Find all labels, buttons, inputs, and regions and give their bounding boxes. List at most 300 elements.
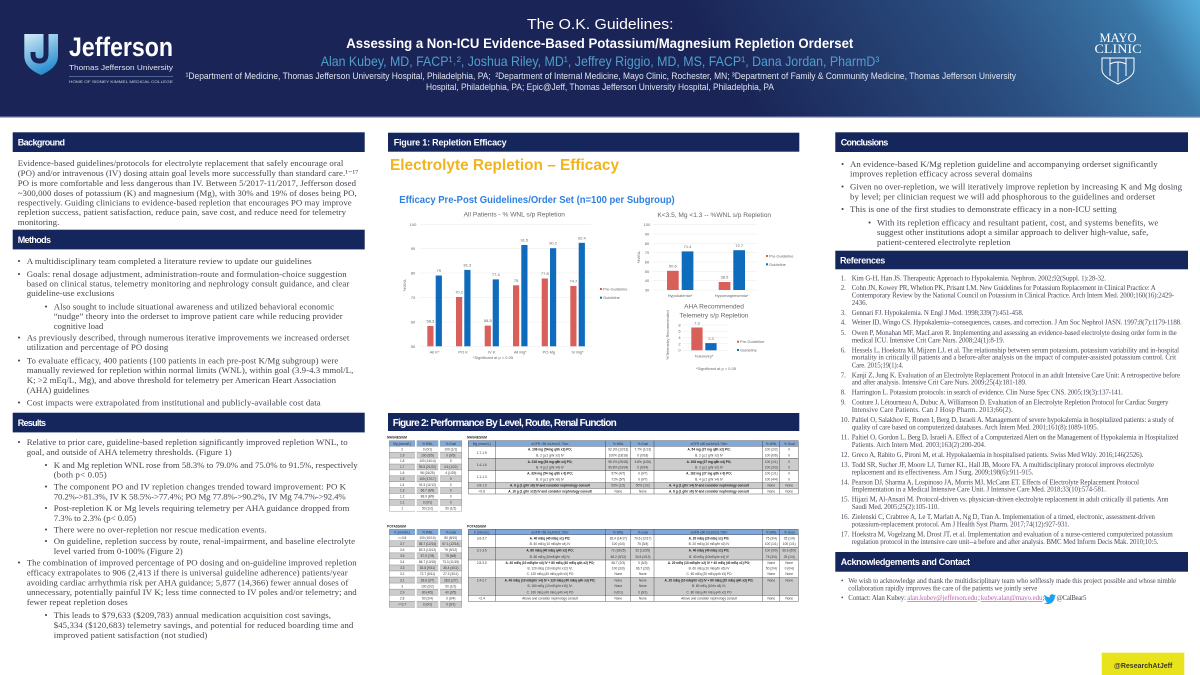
table: potassium by level: 73.3 (11/15) [442,560,459,564]
table: magnesium by level: 1.5 [400,477,405,481]
results bullets: (both p< 0.05) [54,470,107,480]
heading: acknowledgements: Acknowledgements and Contact [841,557,970,567]
reference list: 5. [841,330,846,337]
table: potassium protocol: None [614,572,622,576]
background text: PO is more comfortable and less dangerous than IV. Between 5/2017-11/2017, Jefferson dosed [18,178,357,188]
bar chart: low potassium and magnesium: Guideline [769,262,787,267]
figure headline: Electrolyte Repletion – Efficacy [390,157,619,174]
bar chart: telemetry: 7.3 [694,320,701,326]
conclusions bullets: An evidence-based K/Mg repletion guideline and accompanying orderset significantly [850,159,1158,169]
conclusions bullets: patient-centered electrolyte repletion [877,237,1011,247]
table: potassium protocol: 69.2 (9/13) [611,555,626,559]
table: magnesium protocol: B. 6 g (1 g/hr x6) IV [536,478,565,482]
table: magnesium by level: 0 [450,495,452,499]
table: potassium by level: 28.6 (2/7) [421,578,434,582]
table: potassium by level: K (mmol/L) [394,530,410,534]
reference list: Greco A, Rabito G, Pironi M, et al. Hypokalaemia in hospitalised patients. Swiss Med Wkly. 2016;146(2526). [852,452,1144,459]
table: potassium protocol: None [614,584,622,588]
table: magnesium by level: 96 (24/25) [420,471,435,475]
contact line: ; [978,595,980,602]
results bullets: • [18,558,21,568]
heading: figure 2 [388,413,799,431]
Mayo Clinic logo: MAYO [1099,31,1137,45]
reference list: Pearson DJ, Sharma A, Lospinoso JA, Morris MJ, McCann ET. Effects of Electrolyte Replacement Protocol [852,479,1139,486]
heading: figure 1: Figure 1: Repletion Efficacy [394,138,507,148]
table: potassium by level: 100 (2/2) [421,584,434,588]
table: potassium protocol: 66.6 (6/9) [782,548,796,552]
reference list: Intensive Care Patients. Can J Hosp Pharm. 2013;66(2). [852,407,1013,414]
bar chart: low potassium and magnesium [636,212,794,298]
reference list: Todd SR, Sucher JF, Moore LJ, Turner KL, Hall JB, Moore FA. A multidisciplinary protocol improves electrolyte [852,462,1154,469]
table: potassium protocol: A. 80 mEq (40 mEq q4h x2) PO; [526,548,574,552]
methods bullets: • [18,398,21,408]
table: magnesium protocol: eGFR >50 mL/min/1.73m² [532,442,568,446]
bar chart: all patients: *Significant at p < 0.05 [473,355,514,360]
heading: background: Background [18,138,65,148]
table: potassium protocol: 100 (3/3) [612,566,625,570]
table: potassium by level: 83.3 (10/12) [419,548,436,552]
reference list: Kim G-H, Han JS. Therapeutic Approach to Hypokalemia. Nephron. 2002;92(Suppl. 1):28-32. [852,276,1106,283]
table: potassium protocol: C. 60 mEq (20 mEq q4h x3) PO [686,572,732,576]
table: magnesium protocol: A. 54 mg (27 mg q8h x2) PO; [687,448,731,452]
bar chart: low potassium and magnesium: 70 [645,250,650,255]
table: magnesium protocol: 0 (0/7) [638,472,647,476]
table: magnesium protocol: % WNL [613,442,624,446]
table: magnesium protocol: A. 6 g (1 g/hr x6) IV and consider nephrology consult [669,489,750,493]
table: potassium protocol: 50 (2/4) [766,566,777,570]
bar chart: telemetry: 4 [678,335,681,340]
background text: Evidence-based guidelines/protocols for electrolyte replacement that safely encourage oral [18,158,344,168]
table: magnesium protocol: 100 (2/2) [765,448,778,452]
heading: results: Results [18,418,46,428]
table: potassium by level: POTASSIUM [387,524,406,528]
results bullets: • [44,536,48,546]
table: potassium protocol: 100 (1/1) [765,542,778,546]
conclusions bullets: by level; per clinician request we will add phosphorous to the guidelines and orderset [850,192,1156,202]
table: potassium protocol: 82.4 (14/17) [610,536,627,540]
table: magnesium protocol [467,436,798,494]
table: magnesium protocol: B. 4 g (1 g/hr x4) IV [695,478,724,482]
bar chart: all patients: PO K [458,350,468,354]
table: potassium by level: 36.4 (4/11) [443,566,458,570]
table: potassium by level: 3.5 [400,554,405,558]
panel: background [13,132,365,227]
panel: acknowledgements and contact [835,552,1188,604]
affiliations: Hospital, Philadelphia, PA; Epic@Jeff, Thomas Jefferson University Hospital, Philadelphia, PA [426,82,775,93]
table: potassium by level: 3.4 [400,560,405,564]
bar chart: low potassium and magnesium: %WNL [636,250,641,263]
table: potassium protocol: 75 (3/4) [766,555,777,559]
table: potassium protocol: 2.4-2.7 [477,578,487,582]
bar chart: telemetry: *Significant at p < 0.05 [696,366,737,371]
results bullets: unnecessary, potentially painful IV K; less time connected to IV poles and/or telemetry; and [27,587,357,597]
contact line: ; [1042,595,1044,602]
methods bullets: Also sought to include situational awareness and utilized behavioral economic [54,302,334,312]
title: The O.K. Guidelines: [527,16,674,33]
table: magnesium by level: 2 [401,447,403,451]
table: potassium protocol: None [785,572,793,576]
conclusions bullets [841,159,1183,247]
table: magnesium by level: 1.6 [400,471,405,475]
table: magnesium protocol: A. 4 g (1 g/hr x4) IV and consider nephrology consult [669,484,750,488]
table: potassium protocol: eGFR >50 mL/min/1.73m² [532,530,568,534]
acknowledgement text [841,578,1176,592]
background text: (PO) and/or intravenous (IV) dosing attain goal levels more successfully than standard care.¹⁻¹⁷ [18,168,358,178]
contact line: @CalBear5 [1056,595,1087,602]
conclusions bullets: This is one of the first studies to demonstrate efficacy in a non-ICU setting [850,204,1117,214]
heading: figure 2: Figure 2: Performance By Level, Route, Renal Function [393,418,617,429]
table: potassium protocol: None [785,596,793,600]
table: potassium by level: <=2.7 [398,602,407,606]
bar chart: all patients: IV Mg* [571,350,584,354]
reference list: 2. [841,285,846,292]
table: magnesium protocol: A. 162 mg (27 mg q8h x 6) PO; [686,472,732,476]
reference list: Contemporary Review by the National Council on Potassium in Clinical Practice. Arch Intern Med. 2000;160(16):2429- [852,293,1175,300]
table: potassium protocol: <2.4 [479,596,485,600]
header banner [0,0,1200,118]
table: potassium protocol: A. 20 mEq (10 mEq/hr x2) IV + 40 mEq (40 mEq x1) PO; [668,561,750,565]
bar chart: low potassium and magnesium: Hypomagnesemia* [715,293,749,298]
table: magnesium by level: 1.2 [400,495,405,499]
reference list: Harrington L. Potassium protocols: in search of evidence. Clin Nurse Spec CNS. 2005;19(3):137-141. [852,390,1123,397]
table: potassium protocol: eGFR ≤50 mL/min/1.73m² [691,530,727,534]
table: magnesium by level: 0 [450,483,452,487]
methods bullets: To evaluate efficacy, 400 patients (100 patients in each pre-post K/Mg subgroup) were [27,356,338,366]
table: potassium protocol: A. 20 mEq (10 mEq/hr x2) IV + 60 mEq (20 mEq q4h x3) PO; [664,578,754,582]
bar chart: all patients: All Patients - % WNL s/p Repletion [464,211,565,218]
results bullets: The component PO and IV repletion changes trended toward improvement: PO K [54,482,347,492]
table: potassium protocol: None [767,596,775,600]
table: magnesium by level: 1.7 [400,465,405,469]
table: potassium protocol: C. 160 mEq (40 mEq q4h x4) PO [527,590,574,594]
table: magnesium by level: % WNL [422,442,433,446]
table: potassium protocol: 25 (1/4) [784,536,795,540]
contact line: alan.kubey@jefferson.edu [907,595,978,602]
table: potassium protocol: 66.7 (2/3) [636,566,650,570]
heading: conclusions: Conclusions [841,138,888,148]
methods bullets: guideline-use exclusions [27,288,115,298]
table: magnesium by level: 0 (0/5) [446,453,455,457]
table: magnesium protocol: 100 (1/1) [765,460,778,464]
reference list: 10. [841,417,850,424]
bar chart: all patients: 60 [411,320,416,324]
table: potassium protocol: 2.8-3.0 [477,561,487,565]
bar chart: telemetry: 8 [678,322,681,328]
reference list: Couture J, Létourneau A, Dubuc A, Williamson D. Evaluation of an Electrolyte Repletion Protocol for Cardiac Surgery [852,400,1169,407]
callout: research handle: @ResearchAtJeff [1114,661,1173,670]
table: magnesium protocol: 57% (4/7) [611,472,625,476]
callout: research handle [1102,653,1184,675]
table: potassium protocol: 3.1-3.5 [477,548,487,552]
table: magnesium by level: 91.5 (11/12) [419,483,436,487]
reference list: 13. [841,462,850,469]
bar chart: all patients: 74.7 [570,278,578,284]
methods bullets: “nudge” theory into the orderset to improve patient care while reducing provider [54,311,343,321]
table: potassium by level: 3.3 [400,566,405,570]
table: magnesium by level: 88.9 (8/9) [421,495,434,499]
table: potassium by level [387,524,462,608]
bar chart: all patients: 79 [437,268,442,273]
Jefferson logo: Jefferson [69,32,173,62]
table: potassium protocol: B. 80 mEq (10/hr x8) IV; [692,584,726,588]
background text: repletion success, patient satisfaction, reduce pain, save cost, and reduce need for telemetry [18,207,347,217]
table: potassium protocol: None [639,572,647,576]
results bullets: • [44,503,48,513]
bar chart: all patients: %WNL [402,278,407,291]
background text: monitoring. [18,217,59,227]
table: magnesium protocol: % WNL [766,442,777,446]
table: magnesium protocol: 1.7-1.9 [477,451,487,455]
conclusions bullets: • [841,204,844,214]
table: magnesium protocol: B. 2 g (1 g/hr x2) IV [695,466,724,470]
table: magnesium protocol: None [639,489,647,493]
table: magnesium by level: 1.4 [400,483,405,487]
table: potassium protocol: None [639,584,647,588]
methods bullets: utilization and percentage of PO dosing [27,342,169,352]
reference list: 1. [841,276,846,283]
methods bullets: Goals: renal dosage adjustment, administration-route and formulation-choice suggestion [27,269,347,279]
table: magnesium protocol: 50% (1/2) [611,484,625,488]
table: magnesium protocol: 3.8% (1/26) [635,460,651,464]
bar chart: all patients: Guideline [603,295,621,300]
table: potassium protocol: 30.8 (4/13) [635,555,651,559]
bar chart: all patients: 77.8 [541,271,549,276]
table: magnesium by level: 1.3 [400,489,405,493]
table: potassium protocol: B. 40 mEq (10mEq/hr x4) IV [689,555,730,559]
bar chart: all patients: Pre-Guideline [603,286,628,292]
reference list: 9. [841,400,846,407]
conclusions bullets: With its repletion efficacy and resultant patient, cost, and systems benefits, we [877,218,1158,228]
table: potassium protocol: 0 (0/3) [638,561,647,565]
table: potassium protocol: B. 40 mEq (10 mEq/hr x4) IV [530,542,571,546]
results bullets: • [44,482,48,492]
bar chart: all patients: 91.5 [521,238,529,242]
reference list: Implementation in a Medical Intensive Care Unit. J Intensive Care Med. 2018;33(10):574-581. [852,487,1106,494]
table: potassium protocol: K (mmol/L) [474,530,489,534]
table: magnesium protocol: 0 [788,454,790,458]
reference list: 11. [841,435,849,442]
table: magnesium by level: 0 [450,459,452,463]
table: magnesium protocol: 0.8-1.0 [477,484,487,488]
table: magnesium protocol: B. 2 g (1 g/hr x2) IV [536,454,565,458]
table: potassium protocol: B. 60 mEq (10 mEq/hr x6) IV [689,566,730,570]
methods bullets: manually reviewed for repletion within normal limits (WNL), within goal (3.9-4.3 mmol/L, [27,365,353,375]
bar chart: low potassium and magnesium: 71.4 [684,244,692,249]
table: potassium protocol: 100 (1/1) [783,542,796,546]
table: potassium protocol: % WNL [613,530,624,534]
table: potassium protocol: C. 80 mEq (40 mEq q4h x2) PO [686,590,732,594]
methods bullets: • [18,356,21,366]
table: potassium protocol: None [767,561,775,565]
table: magnesium protocol: 95.8% (23/24) [608,466,628,470]
reference list: Weiner ID, Wingo CS. Hypokalemia--consequences, causes, and correction. J Am Soc Nephrol JASN. 1997;8(7):1179-1188. [852,320,1182,327]
table: magnesium protocol: 0 (0/24) [637,466,648,470]
bar chart: low potassium and magnesium: K<3.5, Mg <1.3 -- %WNL s/p Repletion [657,212,771,219]
table: magnesium protocol: 0 (0/18) [637,454,648,458]
table: potassium protocol: 66.7 (2/3) [611,561,625,565]
table: potassium by level: 50 (2/4) [422,596,433,600]
chart subtitle: Efficacy Pre-Post Guidelines/Order Set (n=100 per Subgroup) [399,194,675,206]
table: potassium by level: 87.5 (7/8) [421,554,434,558]
table: magnesium protocol: 92.3% (12/13) [608,448,628,452]
table: magnesium protocol: MAGNESIUM [467,436,487,440]
table: potassium protocol: 100 (4/4) [612,542,625,546]
reference list: and after analysis. Intensive Crit Care Nurs. 2009;25(4):181-189. [852,380,1027,387]
bar chart: all patients: 90.2 [549,241,558,246]
reference list: Saudi Med. 2005;25(2):105-110. [852,504,939,511]
icon: twitter bird [1044,594,1056,604]
bar chart: low potassium and magnesium: 50 [645,269,650,274]
table: magnesium by level: 0 [450,489,452,493]
results bullets: improved patient satisfaction (not studied) [54,630,207,640]
reference list: 7. [841,372,846,379]
table: potassium by level: % WNL [422,530,433,534]
bar chart: all patients: All Mg* [514,350,527,354]
bar chart: all patients: All K* [430,350,440,354]
reference list: Gennari FJ. Hypokalemia. N Engl J Med. 1998;339(7):451-458. [852,310,1024,317]
table: potassium by level: 80 (4/5) [422,590,433,594]
conclusions bullets: Given no over-repletion, we will iteratively improve repletion by increasing K and Mg dosing [850,182,1183,192]
table: potassium protocol: None [614,596,622,600]
table: potassium by level: 100 (10/10) [419,536,436,540]
methods bullets: • [44,302,48,312]
reference list: 6. [841,347,846,354]
table: potassium protocol: 0 (0/1) [614,590,623,594]
bar chart: telemetry: 6 [678,329,681,334]
table: magnesium protocol: 1.1-1.3 [477,475,487,479]
table: magnesium protocol: % Goal [784,442,795,446]
conclusions bullets: • [841,182,844,192]
conclusions bullets: • [841,159,844,169]
table: magnesium by level: 4 (1/25) [445,471,456,475]
methods bullets [18,256,353,408]
reference list: Cohn JN, Kowey PR, Whelton PK, Prisant LM. New Guidelines for Potassium Replacement in Clinical Practice: A [852,285,1156,292]
results bullets: • [44,524,48,534]
bar chart: all patients [402,211,628,360]
table: magnesium protocol: eGFR ≤50 mL/min/1.73m² [691,442,727,446]
bar chart: telemetry: Pre-Guideline [740,339,765,344]
bar chart: low potassium and magnesium: 80 [645,241,650,246]
table: potassium by level: 50 (1/2) [445,584,456,588]
results bullets: goal, and outside of AHA telemetry thresholds. (Figure 1) [27,447,232,457]
table: potassium by level: 0 (0/1) [423,602,432,606]
table: magnesium protocol: 100% (18/18) [609,454,628,458]
table: potassium by level: 3.1 [400,578,405,582]
table: magnesium protocol: None [767,489,775,493]
table: magnesium by level: 0 [450,477,452,481]
table: magnesium by level: 100 (17/17) [419,477,436,481]
table: magnesium protocol: B. 2 g (1 g/hr x2) IV [695,454,724,458]
reference list: 3. [841,310,846,317]
table: magnesium by level: 4.5 (1/22) [444,465,458,469]
heading: background [13,132,365,152]
table: potassium by level: 40 (2/5) [445,590,456,594]
table: potassium protocol: B. 120 mEq (10 mEq/hr x12) IV; [527,566,573,570]
table: potassium protocol: None [785,578,793,582]
acknowledgement text: We wish to acknowledge and thank the multidisciplinary team who selflessly made this project possible and whose nimble [848,578,1176,585]
table: potassium protocol: % Goal [784,530,795,534]
panel: results [13,413,365,640]
methods bullets: • [18,256,21,266]
table: potassium by level: 2.9 [400,590,405,594]
table: magnesium by level: 0 (0/1) [423,447,432,451]
table: magnesium protocol: 96.2% (25/26) [608,460,628,464]
table: potassium protocol: 70.6 (12/17) [634,536,651,540]
table: magnesium protocol: 71% (5/7) [611,478,625,482]
reference list: Paltiel O, Gordon L, Berg D, Israeli A. Effect of a Computerized Alert on the Management of Hypokalemia in Hospitalized [852,435,1179,442]
reference list: 2436. [852,300,868,307]
contact line: kubey.alan@mayo.edu [981,595,1043,602]
table: potassium protocol: C. 120 mEq (40 mEq q4h x3) PO [527,572,574,576]
table: potassium by level: 72.7 (8/11) [420,572,435,576]
reference list: potassium-replacement protocol. Am J Health Syst Pharm. 2017;74(12):927-931. [852,521,1070,528]
reference list: quality of care based on computerized databases. Arch Intern Med. 2001;161(8):1089-1095. [852,425,1099,432]
table: magnesium by level: 66.7 (6/9) [421,489,434,493]
bar chart: low potassium and magnesium: 30 [645,288,650,292]
table: potassium by level: 28.6 (2/7) [444,578,458,582]
table: magnesium protocol: A. 108 mg (27 mg q8h x4) PO; [687,460,731,464]
results bullets: The combination of improved percentage of PO dosing and on-guideline improved repletion [27,558,357,568]
table: potassium by level: 85.7 (12/14) [419,542,436,546]
reference list: 15. [841,497,850,504]
background text [18,158,358,227]
table: potassium protocol: A. 20 mEq (20 mEq x1) PO; [689,536,729,540]
results bullets: efficacy extrapolates to 906 (2,413 if there is universal guideline adherence) patients/year [27,568,348,578]
table: potassium protocol: POTASSIUM [467,524,486,528]
methods bullets: (AHA) guidelines [27,385,90,395]
table: potassium protocol: 0 (0/1) [638,590,647,594]
results bullets: level varied from 0-100% (Figure 2) [54,546,183,556]
table: magnesium protocol: None [785,484,793,488]
affiliations: ¹Department of Medicine, Thomas Jefferson University Hospital, Philadelphia, PA; ²Department of Internal Medicine, Mayo Clinic, Rochester, MN; ³Department of Family & Community Medicine, Thomas Jefferson University [186,71,1016,82]
results bullets: 7.3% to 2.3% (p< 0.05) [54,513,136,523]
reference list: Hijazi M, Al-Ansari M. Protocol-driven vs. physician-driven electrolyte replacement in adult critically ill patients. Ann [852,497,1169,504]
reference list: Hoekstra M, Vogelzang M, Drost JT, et al. Implementation and evaluation of a nurse-centered computerized potassium [852,531,1173,538]
bar chart: all patients: 58.5 [484,318,492,323]
table: magnesium by level: Mg (mmol/L) [393,442,411,446]
table: potassium protocol: 52 (13/25) [636,548,650,552]
table: potassium by level: 75 (9/12) [444,548,457,552]
bar chart: all patients: 80 [411,270,416,276]
table: magnesium by level: 1.8 [400,459,405,463]
table: potassium by level: 0 (0/1) [446,602,455,606]
methods bullets: Cost impacts were extrapolated from institutional and publicly-available cost data [27,398,321,408]
results bullets: Relative to prior care, guideline-based repletion significantly improved repletion WNL, to [27,437,348,447]
bar chart: telemetry: AHA Recommended [684,304,744,310]
table: potassium protocol: 75 (3/4) [766,536,777,540]
acknowledgement text: • [841,578,844,585]
acknowledgement text: collaboration rapidly improves the care of the patients we jointly serve [848,585,1037,592]
table: potassium protocol: Above and consider nephrology consult [681,596,737,600]
Jefferson logo: HOME OF SIDNEY KIMMEL MEDICAL COLLEGE [69,80,174,84]
results bullets: $45,334 ($120,683) telemetry savings, and potential for reduced boarding time and [54,620,354,630]
bar chart: all patients: 70.2 [455,290,464,294]
table: potassium protocol: 72 (18/25) [611,548,626,552]
bar chart: telemetry [665,304,765,371]
bar chart: all patients: 81.3 [464,262,472,267]
heading: methods [13,230,365,249]
bar chart: all patients: 92.4 [578,235,586,240]
bar chart: all patients: 50 [411,344,416,349]
table: magnesium protocol: 0 (0/7) [638,478,647,482]
table: magnesium protocol: A. 216 mg (54 mg q8h x4) PO; [528,460,572,464]
bar chart: low potassium and magnesium: 90 [645,232,650,236]
table: magnesium protocol: A. 10 g (1 g/hr x10) IV and consider nephrology consult [508,489,593,493]
table: potassium protocol: None [639,578,647,582]
panel: references [835,251,1188,546]
reference list: 16. [841,514,850,521]
table: magnesium by level: 0 [450,500,452,504]
